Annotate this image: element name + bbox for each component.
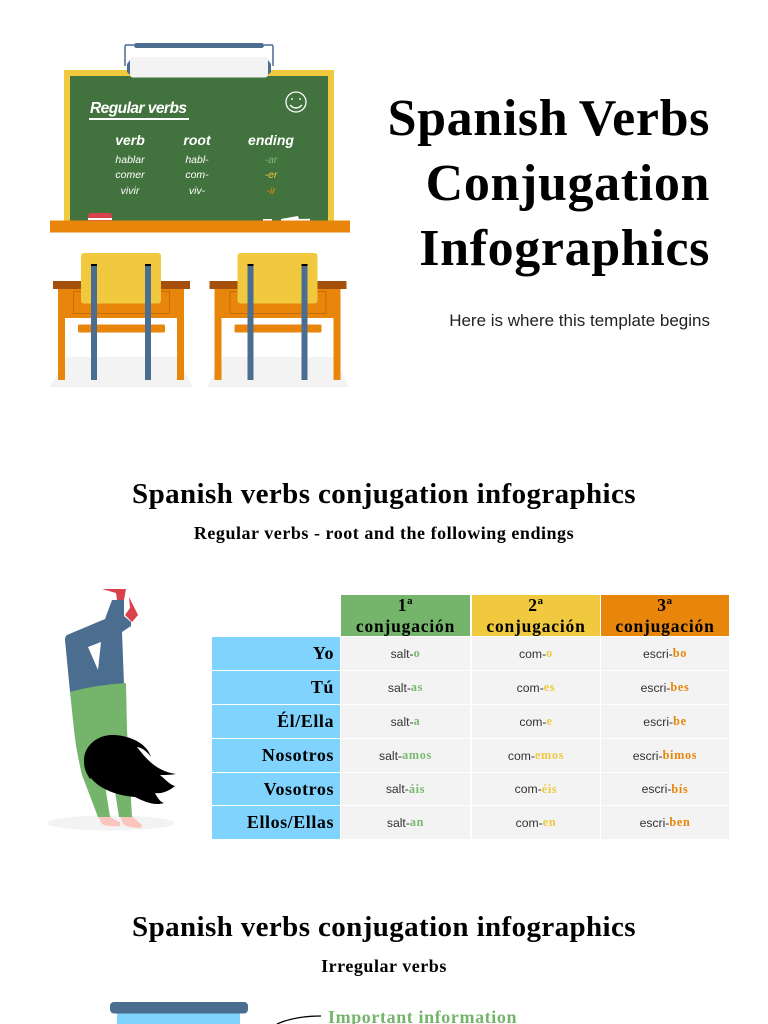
desk drawer (74, 292, 170, 314)
board heading: Regular verbs (90, 100, 187, 117)
illustration: person doing a handstand (47, 589, 176, 830)
text: bo (673, 646, 687, 660)
roller ends (127, 60, 271, 75)
chalkboard surface (70, 76, 328, 222)
left desk and chair (50, 253, 193, 387)
text: a (414, 714, 420, 728)
text: com- (517, 680, 544, 694)
text: escri- (643, 646, 673, 660)
section heading: regular: Spanish verbs conjugation infographics (132, 478, 636, 510)
container body (117, 1012, 240, 1024)
text: bís (671, 782, 688, 796)
board table: com- (185, 169, 209, 181)
board table: ending (248, 132, 294, 148)
text: bes (670, 680, 689, 694)
desk top (53, 281, 190, 289)
main title (388, 90, 710, 277)
text: an (410, 815, 424, 829)
legs in blue trousers (65, 600, 131, 692)
main title: Spanish Verbs (388, 90, 710, 147)
row: Nosotros (212, 739, 340, 772)
chalk pieces (263, 216, 310, 221)
text: en (543, 815, 556, 829)
container lid (110, 1002, 248, 1014)
text: com- (519, 714, 546, 728)
board table: viv- (189, 185, 206, 197)
header: second conjugation: 2ª (528, 595, 544, 615)
board table: hablar (115, 154, 145, 166)
text: es (544, 680, 555, 694)
header: first conjugation (341, 595, 470, 636)
header: third conjugation (601, 595, 729, 636)
main title: Infographics (419, 220, 710, 277)
text: o (414, 646, 420, 660)
heading underline (89, 118, 189, 120)
text: com- (516, 816, 543, 830)
section heading: irregular: Spanish verbs conjugation infographics (132, 911, 636, 943)
text: salt- (391, 714, 414, 728)
green top (70, 683, 132, 817)
ground shadow (47, 816, 175, 830)
row: Nosotros: Nosotros (262, 745, 334, 765)
text: bimos (663, 748, 697, 762)
shoes (102, 589, 138, 622)
row: Ellos/Ellas (212, 806, 340, 839)
main title: Conjugation (426, 155, 710, 212)
text: escri- (641, 680, 670, 694)
gap between legs (88, 642, 101, 670)
callout connector (276, 1015, 321, 1024)
board table: habl- (185, 154, 209, 166)
header: second conjugation: conjugación (486, 616, 586, 636)
header: first conjugation: 1ª (398, 595, 413, 615)
board table: -ar (265, 154, 278, 166)
text: as (411, 680, 423, 694)
text: com- (519, 646, 546, 660)
row: Yo (212, 637, 340, 670)
text: escri- (640, 816, 669, 830)
text: éis (542, 782, 557, 796)
section subheading: irregular: Irregular verbs (321, 956, 447, 976)
header: third conjugation: 3ª (657, 595, 673, 615)
row: Vosotros (212, 773, 340, 805)
text: salt- (379, 748, 402, 762)
chair seat (78, 324, 165, 332)
text: emos (535, 748, 564, 762)
board table: verb (115, 132, 145, 148)
roller bar (134, 43, 264, 48)
row: Tú (212, 671, 340, 704)
board table: -er (265, 169, 278, 181)
board table (115, 132, 294, 197)
row: Él/Ella: Él/Ella (277, 711, 334, 731)
illustration: chalkboard and school desks (50, 43, 350, 387)
subtitle: Here is where this template begins (449, 311, 710, 330)
text: ben (669, 815, 690, 829)
smiley icon (286, 92, 306, 112)
text: salt- (388, 680, 411, 694)
chair back (81, 253, 161, 304)
text: áis (409, 782, 425, 796)
board table: comer (115, 169, 145, 181)
text: salt- (391, 646, 414, 660)
chalkboard frame (64, 70, 334, 222)
text: com- (515, 782, 542, 796)
row: Tú: Tú (311, 677, 334, 697)
header: third conjugation: conjugación (615, 616, 715, 636)
text: be (673, 714, 687, 728)
illustration: blue container top (110, 1002, 248, 1024)
text: o (546, 646, 553, 660)
text: amos (402, 748, 432, 762)
hair (84, 735, 176, 804)
hanging wire (125, 45, 273, 66)
text: salt- (386, 782, 409, 796)
conjugation table (212, 595, 729, 839)
text: salt- (387, 816, 410, 830)
board table: root (183, 132, 212, 148)
text: escri- (642, 782, 671, 796)
eraser (88, 213, 112, 221)
right desk and chair (206, 253, 350, 387)
row: Yo: Yo (313, 643, 334, 663)
feet (98, 816, 142, 828)
chair posts (91, 264, 151, 380)
header: first conjugation: conjugación (356, 616, 455, 636)
text: e (546, 714, 553, 728)
floor shadow (50, 357, 193, 387)
text: escri- (643, 714, 673, 728)
section subheading: regular: Regular verbs - root and the following endings (194, 523, 574, 543)
row: Ellos/Ellas: Ellos/Ellas (247, 812, 334, 832)
header: second conjugation (472, 595, 600, 636)
board table: vivir (121, 185, 140, 197)
row: Él/Ella (212, 705, 340, 738)
text: escri- (633, 748, 663, 762)
row: Vosotros: Vosotros (264, 778, 334, 798)
board table: -ir (266, 185, 276, 197)
roller (130, 57, 268, 78)
desk body (58, 289, 184, 380)
text: com- (508, 748, 535, 762)
chalk tray (50, 220, 350, 232)
